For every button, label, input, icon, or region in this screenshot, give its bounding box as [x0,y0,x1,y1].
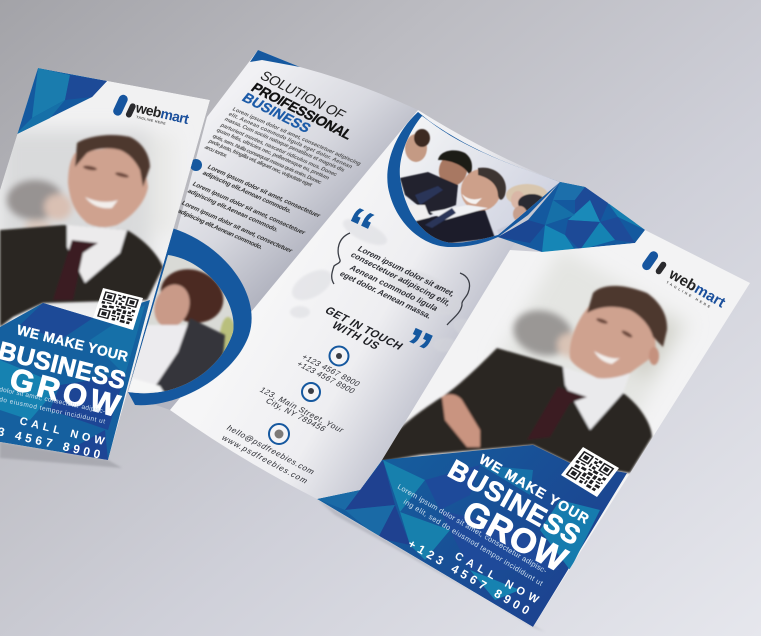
cover lorem text: do eiusmod tempor incididunt ut [0,396,106,425]
heading: get in touch: GET IN TOUCH [322,305,405,352]
cover lorem text: ing elit, sed do eiusmod tempor incididunt ut [402,497,545,588]
closing quote mark: ” [391,316,441,382]
phone numbers: +123 4567 8900 [300,353,362,388]
body paragraph: arcu tortor. [203,145,229,159]
body paragraph: quis, sem. Nulla consequat massa quis enim. Donec [211,134,323,186]
body paragraph: parturient montes, nascetur ridiculus mus. Donec [219,123,338,178]
blue low-poly panel [0,300,150,460]
logo: webmart: TAGLINE HERE [136,115,167,126]
logo: webmart [642,251,726,308]
quote text [338,245,457,320]
short paragraphs: Lorem ipsum dolor sit amet, consectetuer [191,181,307,236]
address: City, NY 789456 [264,397,328,433]
heading: solution of professional business: BUSINESS [239,90,314,135]
heading: solution of professional business: PROIFESSIONAL [248,80,357,142]
photo: woman in blue arc [120,228,252,405]
call now phone: CALL NOW [453,550,541,606]
icon: phone [330,346,348,366]
left curly bracket [332,233,350,284]
short paragraphs [176,164,322,255]
top blue corner [250,50,300,67]
icon: location pin [302,383,320,401]
quote text: Aenean commodo ligula [348,264,440,313]
panel: left brochure front cover [0,68,210,462]
cover headline: BUSINESS [443,454,585,551]
heading: solution of professional business: SOLUTION OF [257,68,350,122]
photo: businessman with crossed arms [380,248,691,473]
cover lorem text: Lorem ipsum dolor sit amet, consectetur adipisc- [396,482,549,576]
short paragraphs: adipiscing elit.Aenean commodo. [186,188,280,234]
logo: webmart [113,94,189,125]
flap: blue low-poly triangles [498,182,645,252]
opening quote mark: “ [333,196,383,261]
quote text: eget dolor. Aenean massa. [338,270,434,320]
body paragraph [203,107,363,188]
website and email: hello@psdfreebies.com [225,424,317,476]
body paragraph: elit. Aenean commodo ligula eget dolor. Aenean [227,112,354,170]
photo: smiling businessman [0,130,175,327]
panel: right front cover [317,230,750,627]
icon: bullet [190,159,202,171]
quote text: Lorem ipsum dolor sit amet, [356,245,457,298]
short paragraphs: Lorem ipsum dolor sit amet, consectetuer [180,200,294,255]
quote text: consectetuer adipiscing elit, [349,251,453,307]
logo: webmart: TAGLINE HERE [666,280,711,309]
panel: inner left page [133,50,418,410]
top blue triangles [12,68,107,135]
website and email: www.psdfreebies.com [219,433,310,485]
cover lorem text: dolor sit amet, consectetur adipisc- [0,386,106,415]
body paragraph: Lorem ipsum dolor sit amet, consectetuer adipiscing [231,107,363,167]
short paragraphs: Lorem ipsum dolor sit amet, consectetuer [206,164,322,219]
logo: webmart: webmart [665,265,728,311]
cover headline: WE MAKE YOUR [476,451,592,527]
call now phone: +123 4567 8900 [406,536,532,618]
call now phone: CALL NOW [18,415,106,448]
panel: middle contact page [170,110,560,499]
icon: email [269,424,289,444]
heading: get in touch: WITH US [329,320,382,352]
body paragraph: massa. Cum sociis natoque penatibus et magnis dis [223,117,346,173]
phone numbers: +123 4567 8900 [295,360,357,395]
short paragraphs: adipiscing elit.Aenean commodo. [201,170,293,215]
world map [287,214,490,352]
address: 123, Main Street, Your [258,386,346,434]
QR code [561,447,619,497]
cover headline: WE MAKE YOUR [15,321,130,364]
short paragraphs: adipiscing elit.Aenean commodo. [176,208,264,251]
logo: webmart: webmart [133,99,191,127]
body paragraph: quam felis, ultricies nec, pellentesque eu, pretium [215,128,330,181]
cover headline: GROW [6,361,124,424]
cover headline [0,324,128,416]
blue low-poly panel [317,445,627,627]
photo: business team in blue arc [385,110,565,250]
cover headline: GROW [456,494,574,580]
QR code [93,288,143,330]
body paragraph: pede justo, fringilla vel, aliquet nec, vulputate eget [207,139,313,188]
right curly bracket [447,273,470,325]
